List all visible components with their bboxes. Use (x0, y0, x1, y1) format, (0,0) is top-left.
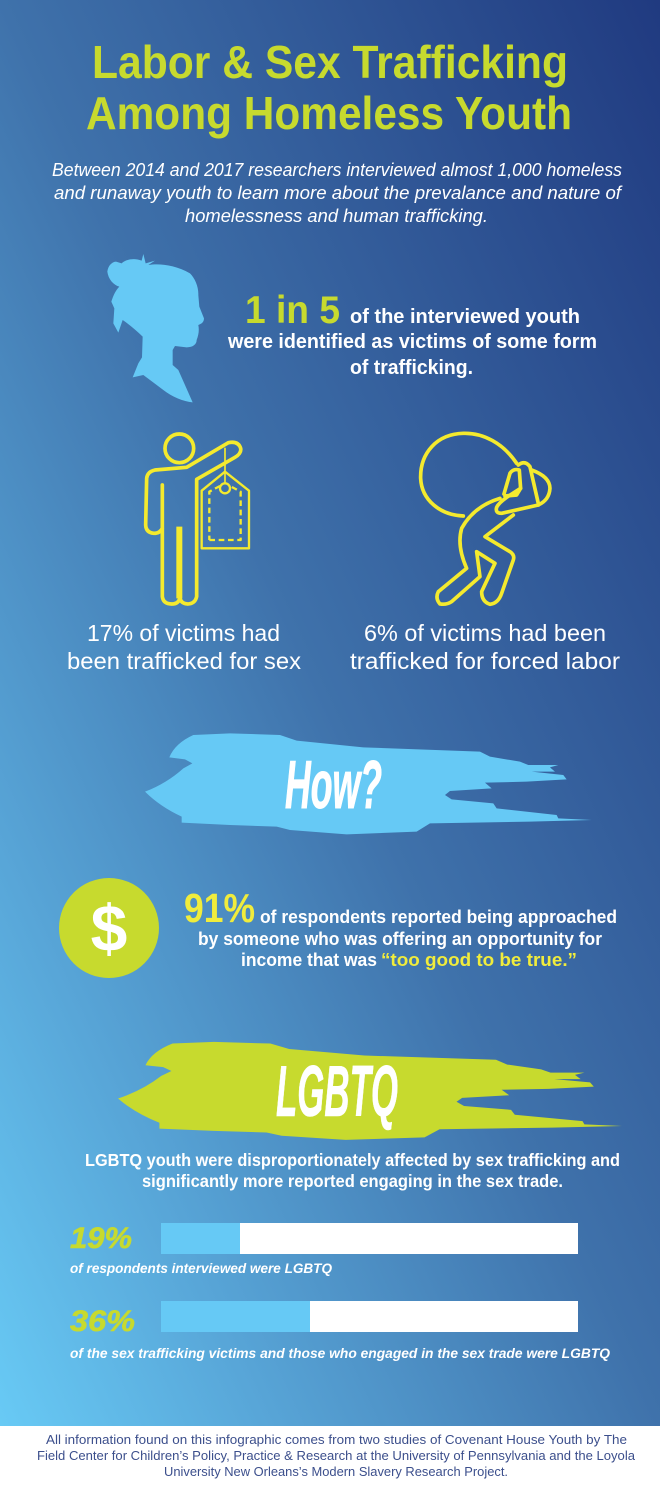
icon: dollar coin (59, 878, 159, 978)
heading: How? on brush stroke (145, 733, 592, 834)
bar chart: 36% (70, 1301, 610, 1361)
heading: LGBTQ on brush stroke (118, 1042, 622, 1140)
icon: woman silhouette (107, 254, 204, 402)
stat: 1 in 5 (227, 289, 597, 379)
bar chart: 36%: 36% (70, 1305, 135, 1338)
footer: sources: Field Center for Children’s Policy, Practice & Research at the University of Pennsylvania and the Loyola (37, 1448, 636, 1463)
stat: 91% approached: by someone who was offering an opportunity for (198, 928, 602, 949)
intro text: Between 2014 and 2017 researchers interviewed almost 1,000 homeless (52, 160, 622, 180)
stat: forced labor: 6% of victims had been (364, 620, 606, 646)
stat: forced labor: trafficked for forced labor (350, 648, 620, 674)
icon: person holding price tag (146, 434, 249, 604)
stat: sex trafficking: been trafficked for sex (67, 648, 302, 674)
title: Among Homeless Youth (86, 87, 572, 139)
icon: person carrying heavy sack (421, 433, 550, 604)
footer: sources: All information found on this infographic comes from two studies of Covenant House Youth by The (46, 1432, 627, 1447)
stat: 91% approached: 91% (184, 885, 255, 931)
bar chart: 19%: 19% (70, 1222, 132, 1255)
footer: sources: University New Orleans’s Modern Slavery Research Project. (164, 1464, 508, 1479)
title (86, 36, 572, 139)
stat: 1 in 5: 1 in 5 (245, 289, 340, 332)
stat: 91% approached: “too good to be true.” (381, 949, 577, 970)
bar chart: 19%: of respondents interviewed were LGBTQ (70, 1260, 332, 1276)
stat: 1 in 5: of the interviewed youth (350, 306, 580, 328)
intro text: homelessness and human trafficking. (185, 206, 488, 226)
bar chart: 19% (70, 1222, 578, 1276)
bar chart: 36%: of the sex trafficking victims and those who engaged in the sex trade were LGBTQ (70, 1345, 610, 1361)
LGBTQ description (85, 1150, 620, 1191)
heading: How? on brush stroke: How? (285, 747, 382, 823)
stat: 1 in 5: were identified as victims of some form (227, 331, 597, 353)
title: Labor & Sex Trafficking (92, 36, 568, 88)
footer: sources (0, 1426, 660, 1493)
LGBTQ description: significantly more reported engaging in the sex trade. (142, 1171, 563, 1191)
intro text (52, 160, 623, 226)
stat: 91% approached (184, 885, 617, 970)
stat: sex trafficking: 17% of victims had (87, 620, 280, 646)
stat: 91% approached: income that was (241, 949, 377, 970)
LGBTQ description: LGBTQ youth were disproportionately affected by sex trafficking and (85, 1150, 620, 1170)
heading: LGBTQ on brush stroke: LGBTQ (276, 1052, 398, 1132)
stat: forced labor (350, 620, 620, 674)
intro text: and runaway youth to learn more about the prevalance and nature of (54, 183, 623, 203)
icon: dollar coin: $ (91, 891, 127, 965)
stat: 1 in 5: of trafficking. (350, 357, 473, 379)
stat: sex trafficking (67, 620, 302, 674)
stat: 91% approached: of respondents reported being approached (260, 906, 617, 927)
